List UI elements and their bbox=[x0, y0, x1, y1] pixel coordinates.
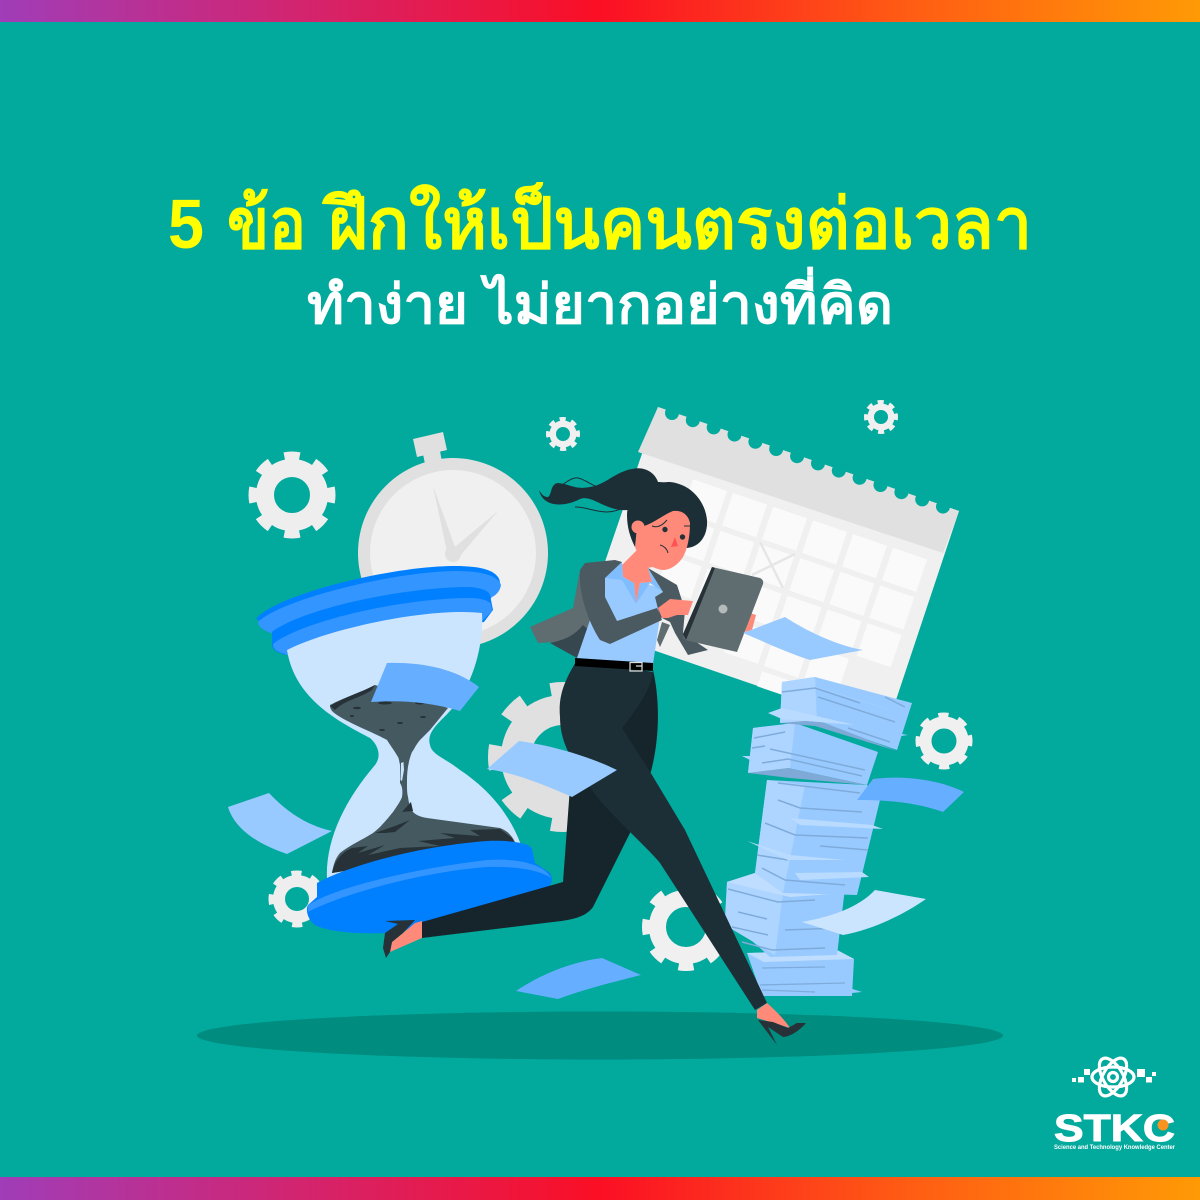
belt bbox=[575, 658, 653, 671]
front foot and heel bbox=[757, 1003, 806, 1045]
heading line 2 bbox=[307, 266, 893, 335]
stack upper ream bbox=[742, 723, 878, 785]
hourglass sand bbox=[330, 685, 515, 873]
back foot and heel bbox=[383, 920, 422, 958]
gear top left bbox=[254, 457, 330, 533]
gear lower left bbox=[272, 874, 322, 924]
hourglass bottom cap bbox=[307, 841, 552, 933]
ear bbox=[632, 520, 644, 534]
gear small top right bbox=[866, 402, 896, 432]
paper over big gear bbox=[487, 741, 617, 797]
hourglass bbox=[256, 566, 552, 933]
pointing hand bbox=[658, 599, 693, 618]
eyes bbox=[662, 527, 685, 540]
paper light, stack bottom bbox=[802, 890, 926, 935]
face bbox=[635, 511, 690, 570]
right hand behind tablet bbox=[745, 613, 756, 632]
hourglass glass bbox=[287, 612, 521, 880]
collar bbox=[605, 562, 663, 604]
atom emblem bbox=[1072, 1054, 1156, 1100]
title bbox=[168, 181, 1032, 335]
jacket back bbox=[530, 570, 605, 658]
paper on floor bbox=[516, 958, 641, 999]
heading line 1: ข้อ bbox=[227, 185, 306, 263]
calendar bbox=[583, 406, 959, 730]
paper near right gear bbox=[857, 778, 964, 812]
gear large behind figure bbox=[496, 690, 630, 824]
stack lower ream bbox=[725, 873, 845, 957]
top gradient bar bbox=[0, 0, 1200, 22]
jacket and left arm bbox=[580, 560, 708, 655]
STKC logo bbox=[1054, 1054, 1175, 1151]
paper stack bbox=[725, 677, 912, 996]
gear right bbox=[919, 716, 969, 766]
tablet bbox=[683, 567, 763, 652]
mouth and brows bbox=[652, 520, 691, 553]
logo subtitle: Science and Technology Knowledge Center bbox=[1054, 1144, 1175, 1151]
gear small top centre bbox=[548, 420, 578, 448]
stack middle ream bbox=[747, 780, 883, 895]
heading line 2: ไม่ยากอย่างที่คิด bbox=[480, 266, 893, 335]
wordmark: STKC bbox=[1054, 1108, 1175, 1150]
ponytail bbox=[539, 468, 690, 520]
paper left bbox=[228, 793, 332, 854]
stopwatch bbox=[358, 432, 548, 648]
head bbox=[627, 482, 707, 570]
stack bottom ream bbox=[747, 950, 862, 996]
paper over hourglass bbox=[371, 663, 479, 711]
heading line 1: ฝึกให้เป็นคนตรงต่อเวลา bbox=[322, 181, 1032, 263]
trousers bbox=[422, 660, 767, 1010]
bottom gradient bar bbox=[0, 1177, 1200, 1200]
nose bbox=[671, 537, 678, 547]
gear lower centre bbox=[647, 888, 725, 966]
paper by tablet bbox=[743, 617, 863, 660]
stack top ream bbox=[768, 677, 912, 751]
woman running bbox=[383, 468, 806, 1045]
neck bbox=[622, 550, 660, 603]
ground shadow bbox=[197, 1012, 1003, 1060]
heading line 2: ทำง่าย bbox=[307, 275, 468, 335]
heading line 1: 5 bbox=[168, 185, 204, 263]
orange dot bbox=[1158, 1120, 1168, 1130]
shirt torso bbox=[577, 575, 663, 664]
hourglass top cap bbox=[256, 566, 501, 655]
